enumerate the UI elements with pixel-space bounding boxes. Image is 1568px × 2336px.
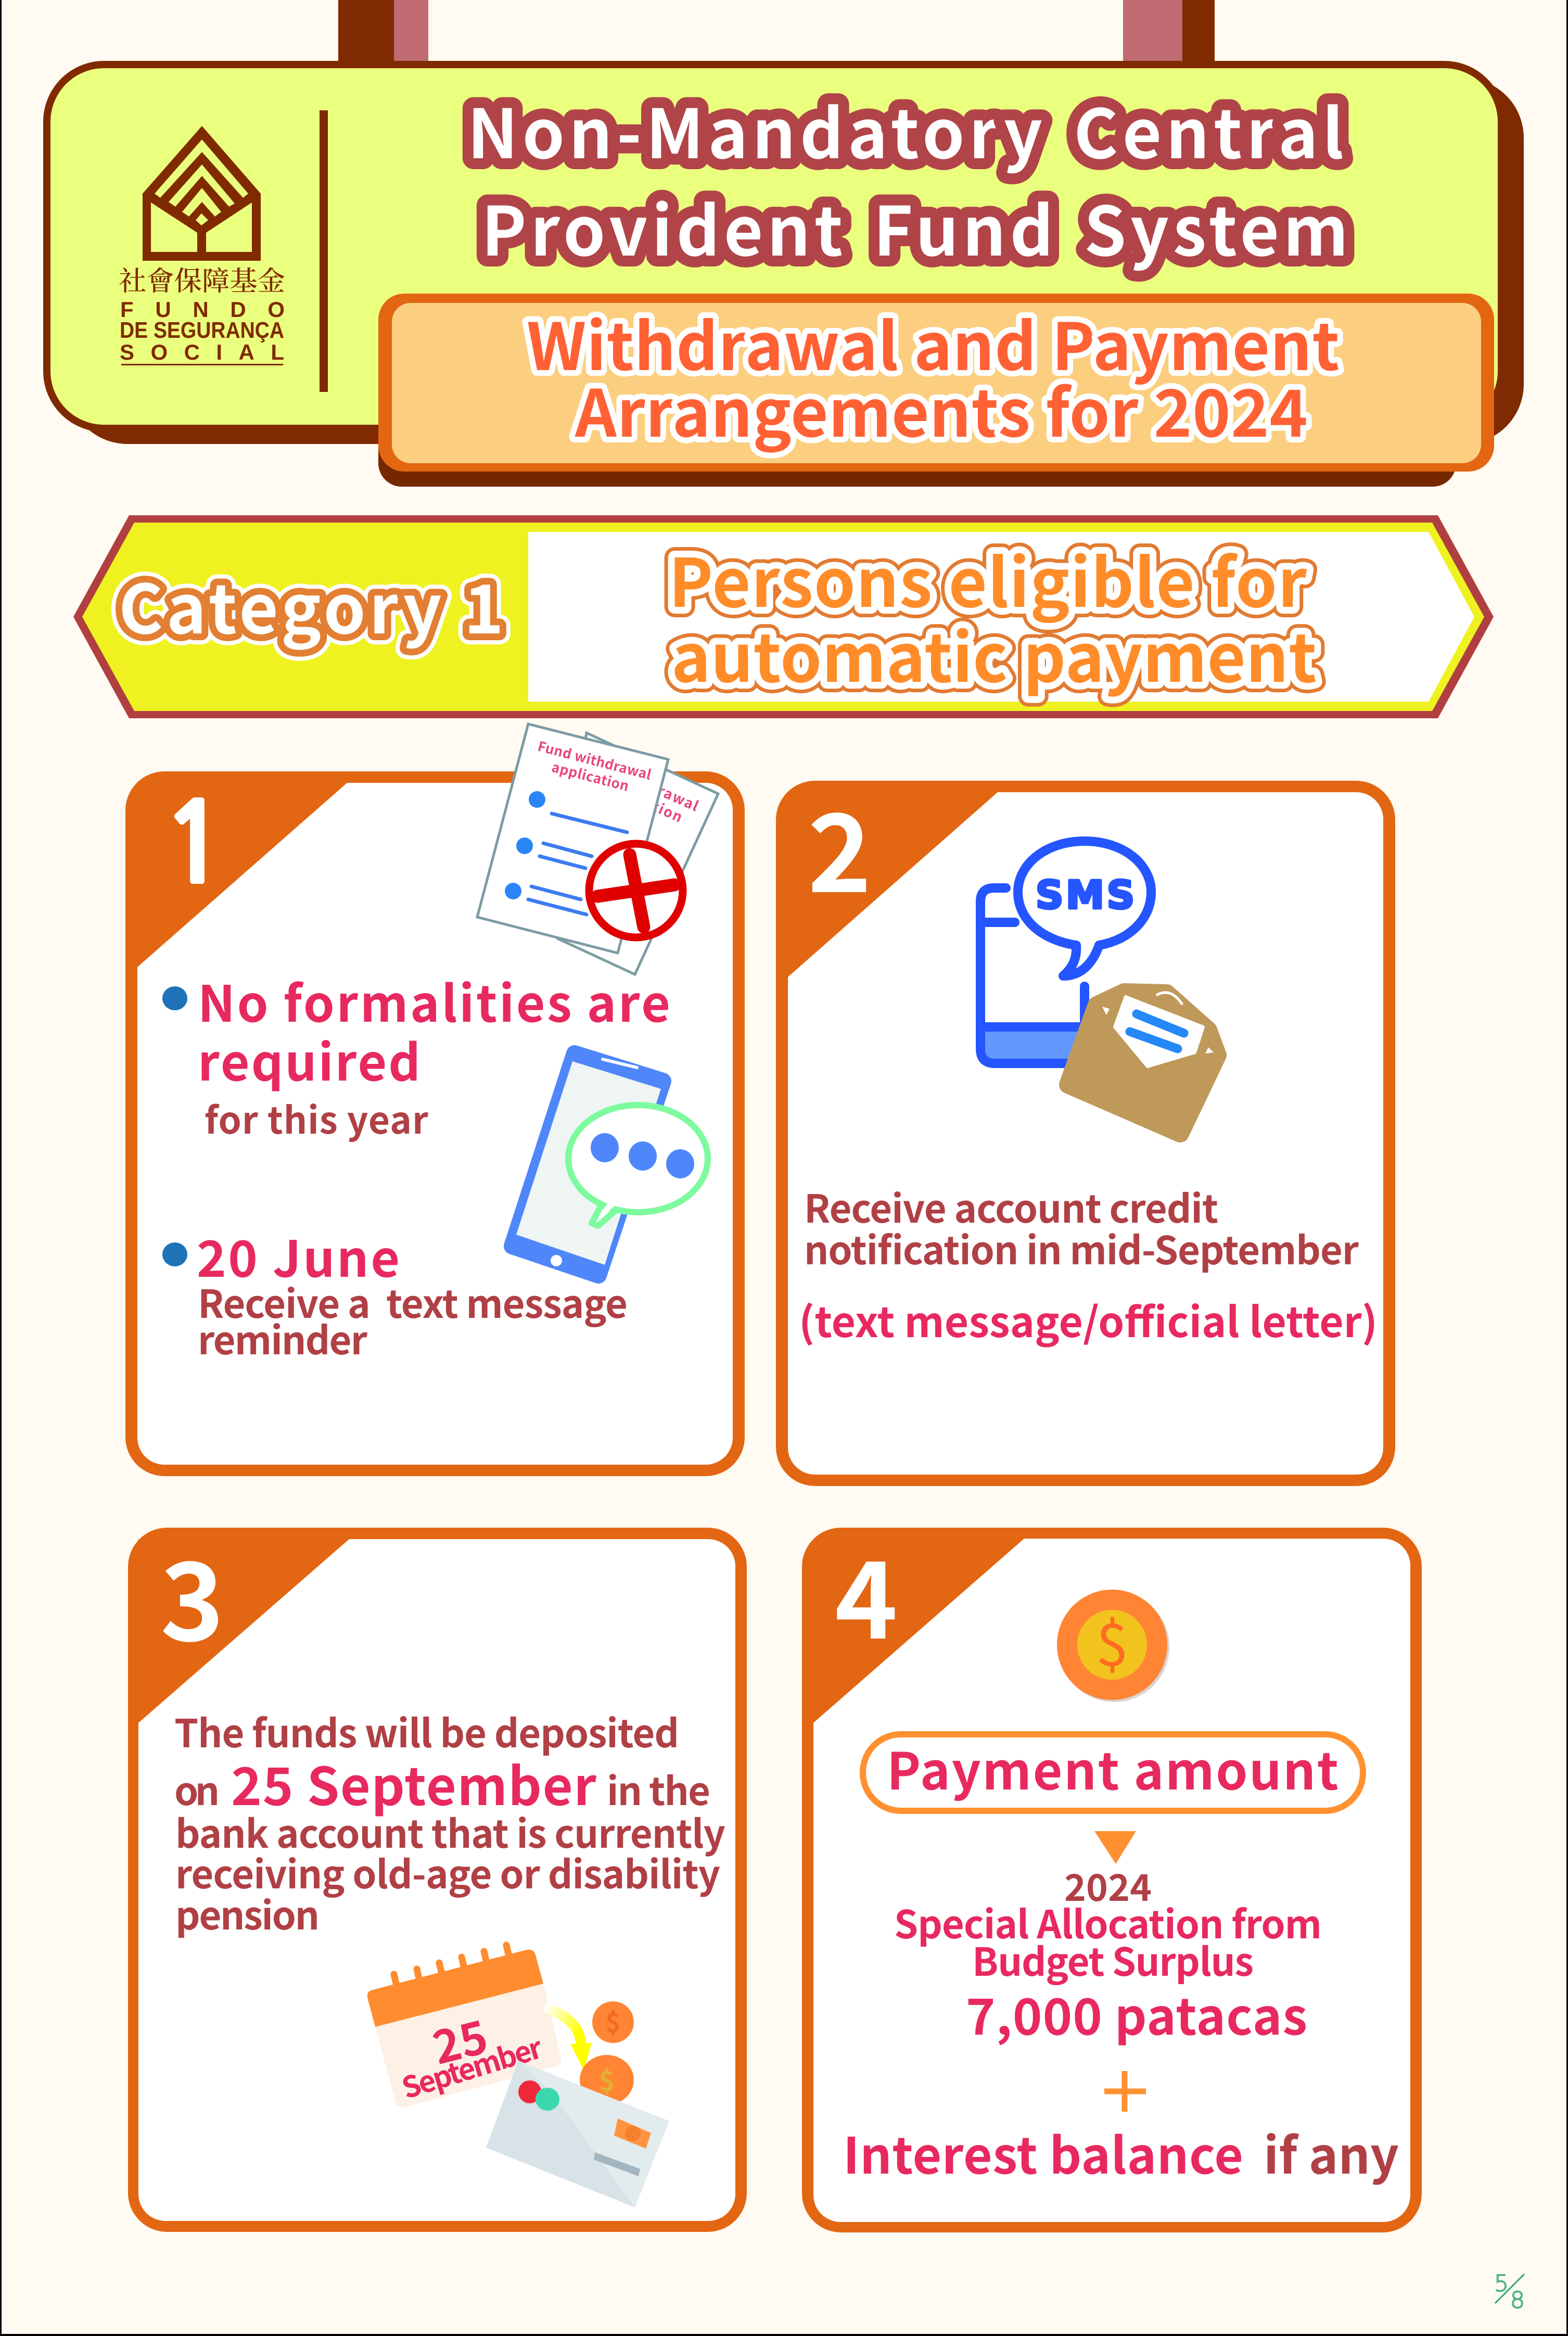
icon: calendar, coins and bank card: $ xyxy=(599,2060,615,2099)
text: deposit details: pension xyxy=(175,1885,320,1941)
icon: dollar coin: $ xyxy=(1096,1598,1128,1683)
category description: automatic payment xyxy=(671,605,1317,701)
page number: 8 xyxy=(1510,2287,1525,2314)
header divider xyxy=(320,110,328,392)
hanging straps xyxy=(338,0,1215,65)
logo: Fundo de Seguranca Social: 社會保障基金 xyxy=(119,259,285,298)
subtitle text xyxy=(527,295,1340,455)
text: interest balance: Interest balance xyxy=(843,2116,1243,2188)
category description: Persons eligible for xyxy=(669,530,1307,626)
category description xyxy=(669,530,1317,701)
icon: phone with chat bubble xyxy=(512,1053,708,1275)
text: credit notification: Receive account credit xyxy=(804,1178,1218,1234)
icon: calendar, coins and bank card: $ xyxy=(605,2002,621,2040)
text: deposit details: on xyxy=(174,1761,220,1817)
text: special allocation: Budget Surplus xyxy=(972,1932,1254,1987)
icon: application forms crossed: Fund withdrawal xyxy=(536,736,654,784)
text: deposit details: in the xyxy=(607,1761,710,1817)
category label: Category 1 xyxy=(119,555,504,653)
logo: Fundo de Seguranca Social: FUNDO xyxy=(120,297,285,322)
subtitle text: Withdrawal and Payment xyxy=(527,295,1340,389)
icon: plus xyxy=(1104,2071,1146,2112)
category description: automatic payment xyxy=(671,605,1317,701)
panel: category banner xyxy=(73,515,1494,718)
panel: header xyxy=(47,65,1524,444)
number 2: 2 xyxy=(808,767,872,923)
text: 20 June: 20 June xyxy=(197,1219,400,1291)
text: 2024: 2024 xyxy=(1064,1859,1152,1912)
panel: step 1 xyxy=(125,724,745,1476)
icon: application forms crossed xyxy=(477,724,718,974)
icon: calendar, coins and bank card: 25 xyxy=(425,2000,494,2078)
text: for this year: for this year xyxy=(205,1091,429,1145)
text: reminder: Receive a text message xyxy=(198,1274,628,1329)
text: credit notification xyxy=(804,1178,1359,1276)
text: deposit details: The funds will be deposited xyxy=(174,1703,679,1759)
text: reminder xyxy=(198,1274,628,1366)
icon: dollar coin xyxy=(1057,1590,1169,1702)
pill: payment amount: Payment amount xyxy=(887,1731,1338,1805)
page number xyxy=(1494,2270,1525,2314)
text: deposit details: 25 September xyxy=(231,1745,596,1820)
panel: step 4 xyxy=(802,1515,1422,2232)
page number: 5 xyxy=(1494,2270,1509,2297)
category description: Persons eligible for xyxy=(669,530,1307,626)
text: no formalities required: No formalities are xyxy=(198,964,670,1036)
title xyxy=(467,80,1348,275)
icon: application forms crossed: application xyxy=(597,772,687,827)
number 4: 4 xyxy=(835,1515,898,1670)
title: Provident Fund System xyxy=(481,177,1348,275)
icon: SMS phone and envelope: SMS xyxy=(1036,873,1134,918)
title: Non-Mandatory Central xyxy=(467,80,1344,178)
text: message or letter: (text message/official letter) xyxy=(799,1289,1378,1350)
text: deposit details: receiving old-age or disability xyxy=(175,1844,720,1900)
icon: calendar, coins and bank card: September xyxy=(396,2025,547,2108)
logo: Fundo de Seguranca Social xyxy=(119,126,285,365)
text: deposit details: bank account that is currently xyxy=(175,1804,725,1859)
text: no formalities required xyxy=(198,964,670,1095)
icon: calendar, coins and bank card xyxy=(367,1945,669,2207)
text: amount: 7,000 patacas xyxy=(966,1977,1307,2049)
text: reminder: reminder xyxy=(198,1310,368,1366)
subtitle text: Arrangements for 2024 xyxy=(575,361,1308,455)
text: no formalities required: required xyxy=(198,1023,420,1095)
icon: application forms crossed: application xyxy=(550,757,631,795)
icon: application forms crossed: withdrawal xyxy=(613,761,703,816)
text: credit notification: notification in mid-September xyxy=(804,1220,1359,1276)
text: special allocation: Special Allocation from xyxy=(894,1894,1322,1950)
number 1: 1 xyxy=(161,790,228,899)
logo: Fundo de Seguranca Social: DE SEGURANÇA xyxy=(120,318,284,343)
bullet: no formalities xyxy=(162,986,187,1010)
text: interest balance: if any xyxy=(1264,2116,1399,2188)
panel: step 3 xyxy=(128,1515,747,2232)
text: special allocation xyxy=(894,1894,1322,1987)
category label: Category 1 xyxy=(119,555,504,653)
text: deposit details xyxy=(174,1703,725,1941)
logo: Fundo de Seguranca Social: SOCIAL xyxy=(120,340,284,364)
arrow: down triangle xyxy=(1094,1831,1136,1864)
panel: step 2 xyxy=(776,767,1395,1486)
icon: SMS phone and envelope xyxy=(980,841,1218,1134)
bullet: 20 June xyxy=(162,1242,187,1266)
number 3: 3 xyxy=(160,1515,224,1672)
panel: subtitle xyxy=(378,294,1494,487)
